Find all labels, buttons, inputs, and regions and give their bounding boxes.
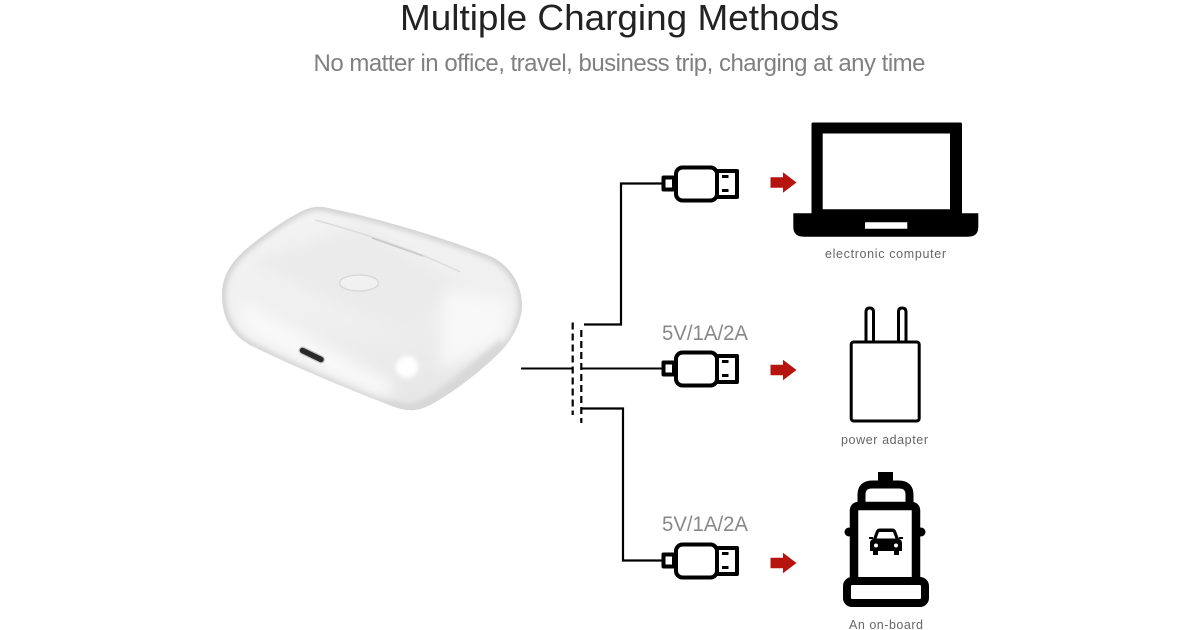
label: power adapter: power adapter: [841, 433, 928, 447]
subtitle: No matter in office, travel, business trip, charging at any time: [314, 50, 926, 77]
case button: [340, 275, 378, 291]
voltage label: adapter: 5V/1A/2A: [662, 322, 748, 345]
icon: car silhouette: [869, 528, 903, 555]
usb connector: computer: [664, 168, 737, 200]
cable and splitter lines: [521, 184, 662, 560]
voltage label: car: 5V/1A/2A: [662, 513, 748, 536]
icon: car charger: [844, 472, 926, 603]
arrow: to car: [770, 553, 796, 573]
case usb-c port: [302, 350, 321, 360]
case seam: [315, 220, 460, 272]
infographic canvas: [222, 4, 978, 629]
label: electronic computer: electronic computer: [825, 247, 946, 261]
icon: power adapter: [851, 308, 919, 421]
charging case photo: [222, 207, 522, 412]
icon: laptop: [793, 122, 978, 237]
arrow: to adapter: [770, 360, 796, 380]
usb connector: car: [664, 544, 737, 578]
arrow: to computer: [770, 172, 796, 193]
usb connector: adapter: [664, 352, 737, 386]
